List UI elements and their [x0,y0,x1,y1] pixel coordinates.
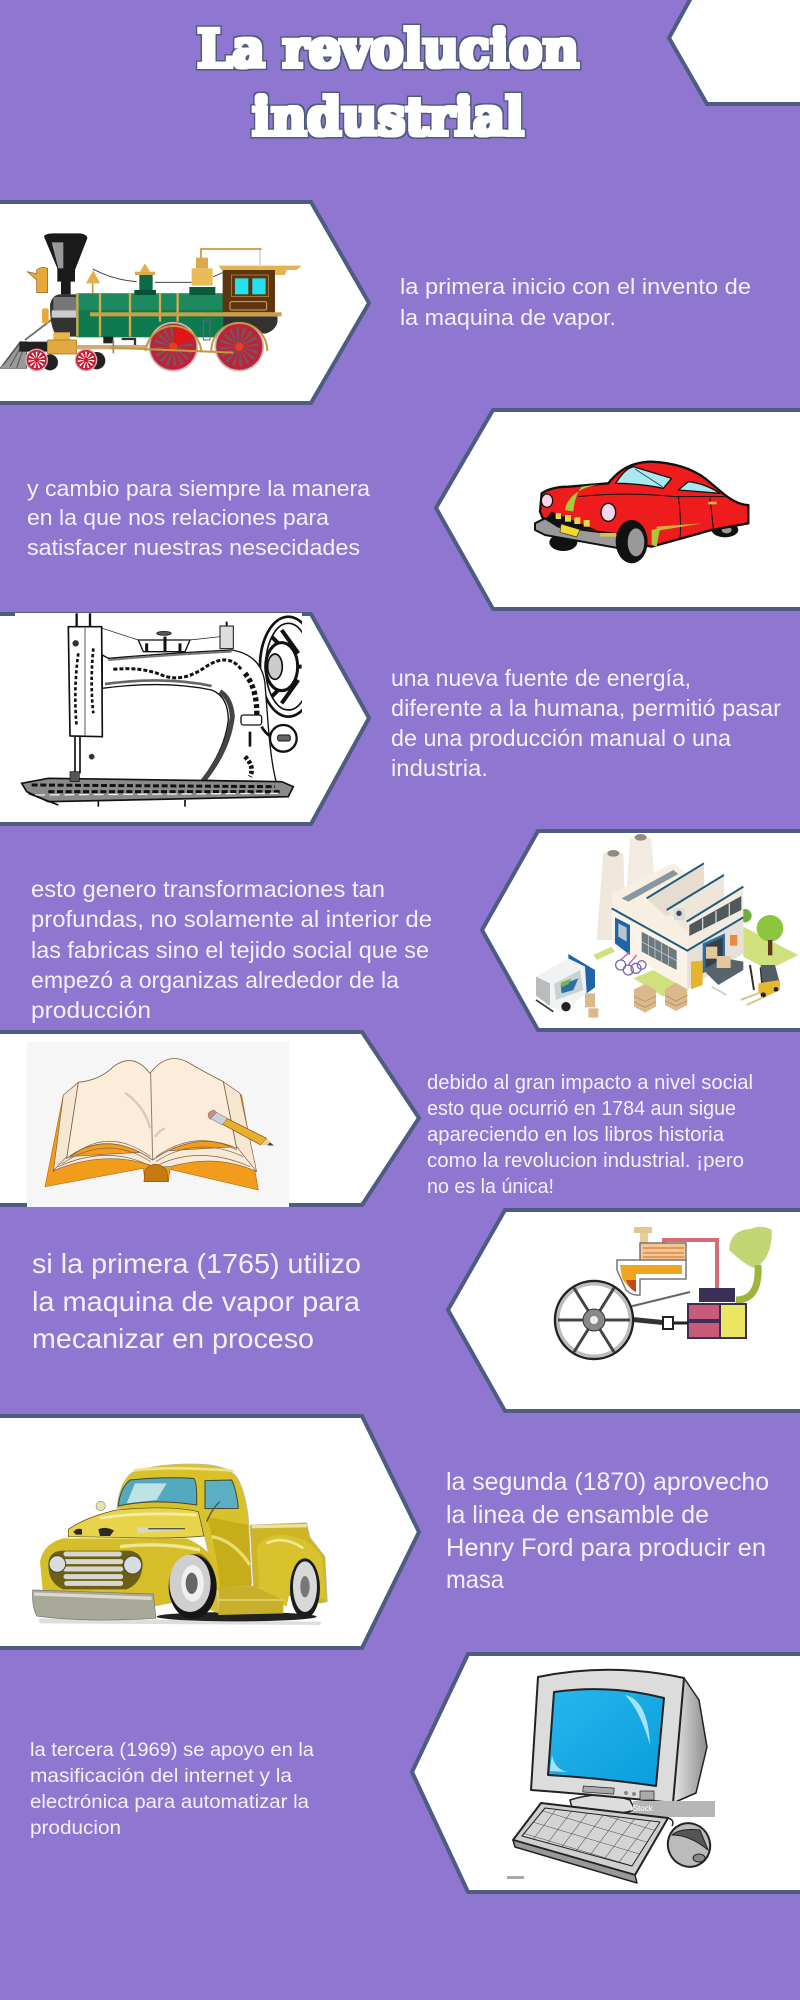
text block 5: apareciendo en los libros historia [427,1124,725,1146]
icon: red car [535,462,748,563]
text block 7: la linea de ensamble de [446,1501,709,1529]
text block 4: esto genero transformaciones tan [31,876,385,902]
text block 1 [400,274,751,330]
text block 6: mecanizar en proceso [32,1323,314,1354]
text block 6 [32,1248,361,1354]
text block 8: masificación del internet y la [30,1766,292,1787]
text block 2: satisfacer nuestras nesecidades [27,535,360,560]
text block 6: la maquina de vapor para [32,1286,360,1317]
text block 7: Henry Ford para producir en [446,1534,766,1562]
text block 3: industria. [391,755,488,781]
panel: book [0,1032,419,1207]
text block 5: esto que ocurrió en 1784 aun sigue [427,1098,736,1120]
icon: sewing machine [22,613,317,807]
text block 3: de una producción manual o una [391,725,731,751]
text block 7: masa [446,1566,504,1594]
icon: desktop computer: iStock [631,1804,654,1813]
panel: yellow truck [0,1416,419,1648]
text block 8: producion [30,1818,121,1839]
text block 3: una nueva fuente de energía, [391,665,691,691]
text block 2: en la que nos relaciones para [27,505,330,530]
text block 6: si la primera (1765) utilizo [32,1248,361,1279]
icon: desktop computer [507,1670,717,1883]
panel: top-right decorative chevron [669,0,800,104]
text block 8: electrónica para automatizar la [30,1792,309,1813]
text block 3 [391,665,781,781]
title [197,19,579,148]
title: industrial [252,87,524,148]
text block 4 [31,876,432,1023]
panel: steam engine [448,1210,800,1411]
panel: factory [482,831,800,1030]
icon: isometric factory [536,834,798,1018]
panel: locomotive [0,202,369,403]
text block 5: debido al gran impacto a nivel social [427,1072,753,1094]
icon: open book with pencil [45,1059,274,1190]
text block 8 [30,1740,314,1839]
text block 2 [27,476,371,560]
text block 2: y cambio para siempre la manera [27,476,371,501]
panel: sewing machine [0,613,369,824]
panel: red car [436,410,800,609]
text block 4: empezó a organizas alrededor de la [31,967,399,993]
text block 7: la segunda (1870) aprovecho [446,1468,769,1496]
text block 1: la primera inicio con el invento de [400,274,751,299]
text block 4: producción [31,997,151,1023]
text block 7 [446,1468,769,1594]
icon: steam locomotive [0,233,302,371]
text block 4: profundas, no solamente al interior de [31,906,432,932]
icon: yellow pickup truck [32,1464,327,1625]
text block 3: diferente a la humana, permitió pasar [391,695,781,721]
title: La revolucion [197,19,579,80]
text block 5 [427,1072,753,1198]
text block 8: la tercera (1969) se apoyo en la [30,1740,314,1761]
text block 1: la maquina de vapor. [400,305,616,330]
text block 4: las fabricas sino el tejido social que se [31,937,429,963]
text block 5: como la revolucion industrial. ¡pero [427,1150,744,1172]
text block 5: no es la única! [427,1176,554,1198]
panel: computer [412,1654,800,1892]
icon: steam engine diagram [555,1227,772,1359]
